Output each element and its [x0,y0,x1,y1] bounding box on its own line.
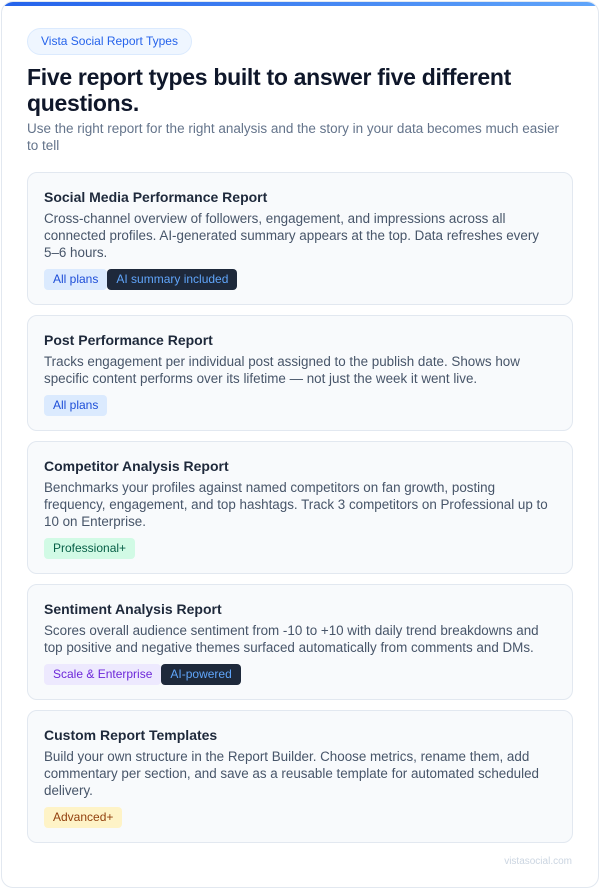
panel: custom templates [27,710,573,843]
title [27,64,511,116]
title: Five report types built to answer five different [27,64,511,90]
panel: competitor analysis: 10 on Enterprise. [44,514,146,529]
tags: All plans [53,272,98,286]
footer: vistasocial.com [504,856,572,867]
panel: competitor analysis: frequency, engagement, and top hashtags. Track 3 competitors on Professional up to [44,497,548,512]
tags: All plans [53,398,98,412]
title: questions. [27,90,139,116]
panel: social media performance: 5–6 hours. [44,245,107,260]
panel: competitor analysis: Benchmarks your profiles against named competitors on fan growth, posting [44,480,495,495]
subtitle: Use the right report for the right analysis and the story in your data becomes much easier [27,121,559,136]
panel: post performance: Post Performance Report [44,332,213,348]
panel: custom templates: delivery. [44,783,93,798]
panel: sentiment analysis: Scores overall audience sentiment from -10 to +10 with daily trend breakdowns and [44,623,539,638]
panel: competitor analysis [27,441,573,574]
panel: sentiment analysis: Sentiment Analysis Report [44,601,222,617]
tags: Advanced+ [53,810,113,824]
tags: Scale & Enterprise [53,667,152,681]
panel: social media performance: connected profiles. AI-generated summary appears at the top. Data refreshes every [44,228,539,243]
tags: AI summary included [116,272,228,286]
panel: custom templates: commentary per section, and save as a reusable template for automated scheduled [44,766,539,781]
badge [27,28,192,55]
badge: Vista Social Report Types [41,34,178,48]
panel: sentiment analysis: top positive and negative themes surfaced automatically from comments and DMs. [44,640,534,655]
panel: post performance [27,315,573,431]
subtitle [27,121,559,153]
tags [44,664,241,685]
panel: post performance: specific content performs over its lifetime — not just the week it went live. [44,371,477,386]
panel: post performance: Tracks engagement per individual post assigned to the publish date. Shows how [44,354,520,369]
panel: custom templates: Build your own structure in the Report Builder. Choose metrics, rename them, add [44,749,529,764]
panel: social media performance: Social Media Performance Report [44,189,267,205]
tags [44,269,237,290]
panel: sentiment analysis [27,584,573,700]
panel: competitor analysis: Competitor Analysis Report [44,458,229,474]
panel: social media performance [27,172,573,305]
subtitle: to tell [27,138,59,153]
tags: AI-powered [170,667,232,681]
panel: custom templates: Custom Report Templates [44,727,217,743]
panel: social media performance: Cross-channel overview of followers, engagement, and impressions across all [44,211,505,226]
tags: Professional+ [53,541,126,555]
